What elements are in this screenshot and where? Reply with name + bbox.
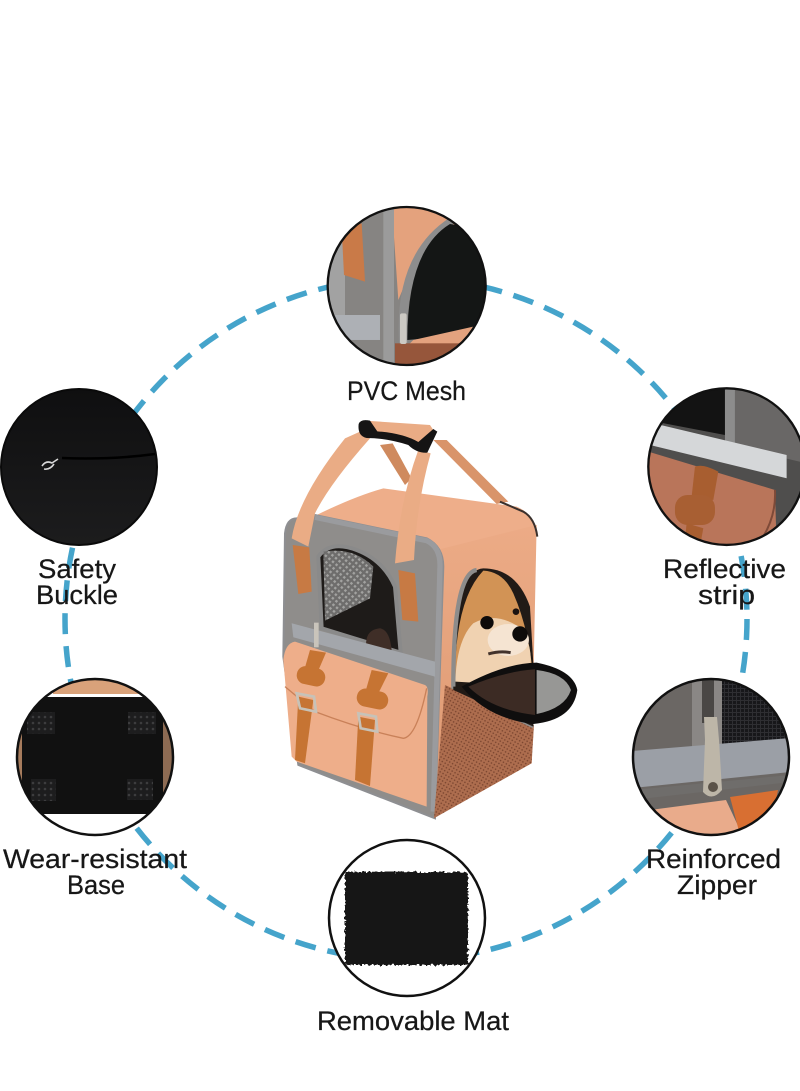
infographic: pet carrier feature ring: strip: [698, 580, 755, 610]
carrier side face: [433, 525, 537, 818]
back handle straps: [380, 440, 508, 504]
main handle straps: [292, 421, 436, 563]
black handle grip: [358, 420, 437, 453]
carrier front face: [283, 515, 443, 818]
side opening interior: [453, 568, 533, 727]
infographic: pet carrier feature ring: Base: [67, 870, 125, 900]
reflective strip: [292, 623, 435, 677]
circle photo: black fleece mat: [329, 840, 485, 996]
feature: safety buckle: [1, 389, 157, 545]
label: Safety Buckle: Safety: [38, 554, 117, 584]
feature: reinforced zipper: [630, 675, 795, 840]
central product: pet carrier backpack with dog: [283, 420, 577, 818]
open mesh flap: [462, 663, 577, 724]
circle photo: reflective strip and flap: [647, 387, 800, 547]
label: Removable Mat: Removable Mat: [317, 1006, 509, 1036]
circle photo: underside with rubber feet: [18, 680, 172, 820]
dashed ring connecting features: [65, 278, 747, 960]
pocket leather strap left: [295, 650, 327, 763]
mesh side pocket: [434, 685, 534, 818]
leather strap ends: [293, 545, 418, 622]
feature: removable mat: [329, 840, 485, 996]
carrier top face: [313, 488, 537, 550]
label: Reinforced Zipper: Reinforced: [646, 844, 781, 874]
front mesh window: [318, 546, 401, 653]
circle photo: zipper pull close-up: [634, 680, 788, 834]
label: PVC Mesh: PVC Mesh: [347, 376, 466, 406]
feature: reflective strip: [647, 387, 800, 547]
zipper pull on strip: [314, 623, 319, 647]
pocket leather strap right: [355, 670, 390, 786]
circle photo: black pouch with clip: [1, 389, 157, 545]
label: Reflective strip: Reflective: [663, 554, 786, 584]
label: Wear-resistant Base: Wear-resistant: [3, 844, 188, 874]
front pocket: [283, 642, 428, 807]
feature: wear-resistant base: [15, 675, 175, 840]
dog: [455, 571, 532, 683]
infographic: pet carrier feature ring: [0, 206, 800, 1030]
infographic: pet carrier feature ring: Buckle: [36, 580, 118, 610]
feature: PVC mesh: [326, 206, 487, 366]
infographic: pet carrier feature ring: Zipper: [677, 870, 757, 900]
circle photo: mesh door: [328, 208, 484, 364]
